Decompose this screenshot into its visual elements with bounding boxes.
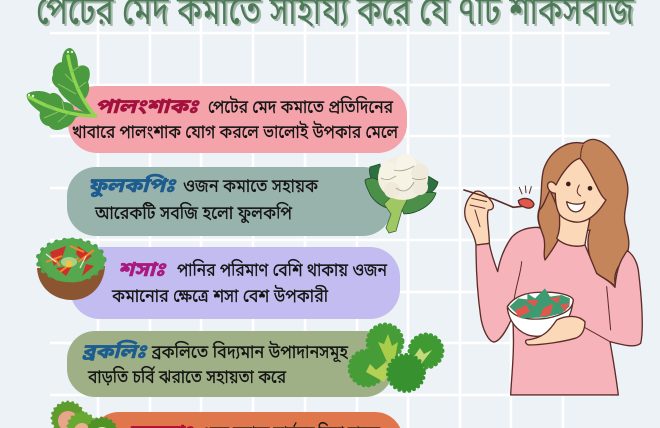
text: cucumber line 1: পানির পরিমাণ বেশি থাকায় ওজন: [177, 260, 388, 280]
panel: spinach: [68, 86, 407, 153]
text: broccoli line 2: বাড়তি চর্বি ঝরাতে সহায়তা করে: [87, 366, 286, 387]
hand with fork: [465, 191, 493, 245]
heading: spinach: পালংশাকঃ: [95, 96, 200, 118]
salad bowl: [507, 303, 573, 336]
text: spinach line 1: পেটের মেদ কমাতে প্রতিদিনের: [208, 97, 393, 117]
hair back: [538, 139, 629, 287]
face: [548, 158, 606, 222]
panel: broccoli: [67, 331, 393, 397]
text: spinach line 2: খাবারে পালংশাক যোগ করলে ভালোই উপকার মেলে: [72, 122, 399, 142]
text: cucumber line 2: কমানোর ক্ষেত্রে শসা বেশ উপকারী: [111, 286, 328, 306]
icon: cauliflower: [365, 154, 438, 233]
panel: cucumber: [70, 247, 400, 319]
heading: cauliflower: ফুলকপিঃ: [88, 173, 177, 197]
heading: broccoli: ব্রকলিঃ: [82, 339, 148, 363]
heading: cucumber: শসাঃ: [118, 259, 167, 281]
hair front left: [538, 190, 562, 260]
icon: bitter gourd slices: [52, 402, 117, 428]
hand holding bowl: [526, 316, 585, 345]
illustration: woman eating salad: [464, 139, 642, 395]
sweater: [476, 227, 642, 395]
panel: bitter gourd: [50, 400, 400, 428]
text: cauliflower line 1: ওজন কমাতে সহায়ক: [183, 176, 318, 196]
panel: cauliflower: [67, 167, 392, 236]
neck: [557, 213, 590, 246]
text: broccoli line 1: ব্রকলিতে বিদ্যমান উপাদানসমূহ: [151, 342, 348, 363]
text: cauliflower line 2: আরেকটি সবজি হলো ফুলকপি: [94, 203, 293, 224]
icon: spinach leaves: [27, 48, 96, 130]
tomato on fork: [518, 198, 534, 208]
icon: salad bowl: [37, 238, 105, 300]
icon: broccoli: [350, 325, 442, 391]
